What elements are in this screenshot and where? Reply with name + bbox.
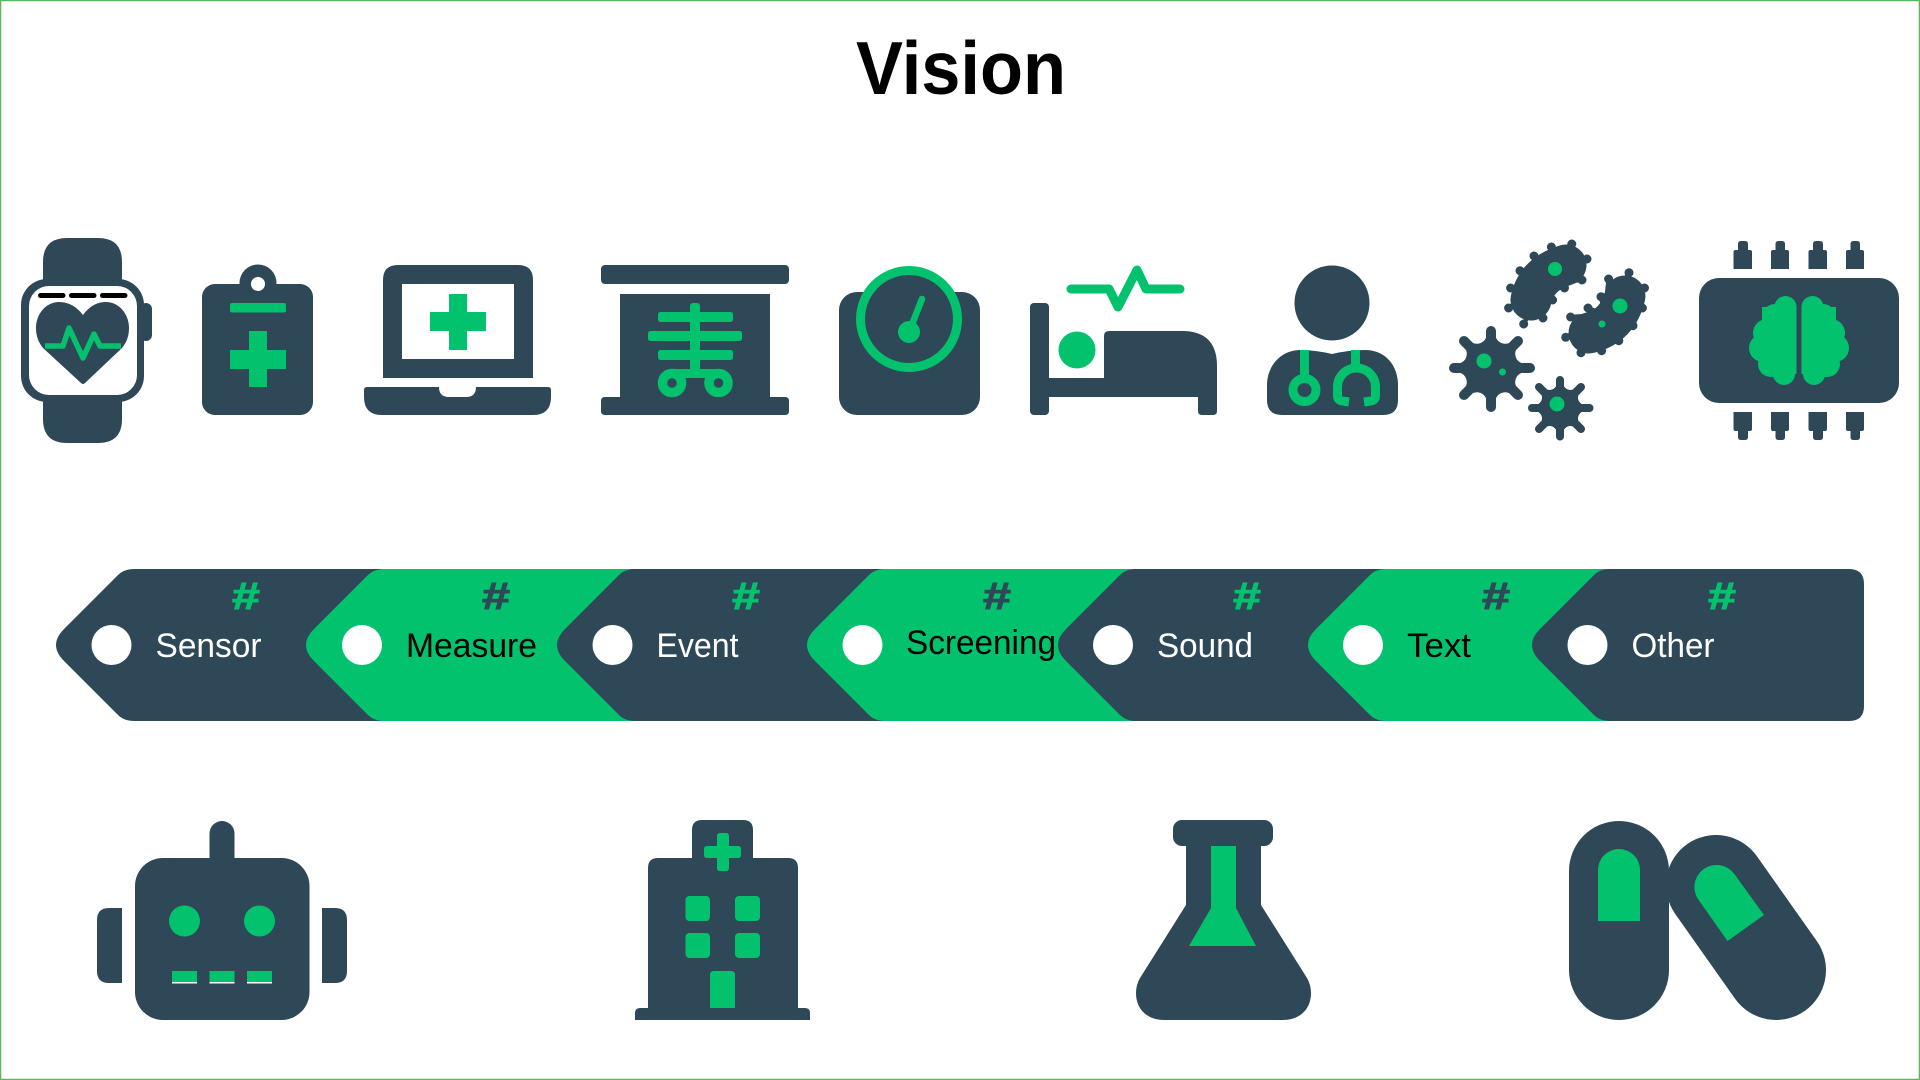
step: Sensor: Sensor bbox=[156, 627, 262, 665]
virus small bbox=[1527, 375, 1593, 441]
step: Event: # bbox=[732, 576, 760, 618]
step: Text bbox=[1308, 569, 1620, 721]
icon: viruses and bacteria bbox=[1447, 244, 1644, 441]
icon: doctor bbox=[1267, 266, 1398, 415]
icon: hospital building bbox=[635, 820, 810, 1020]
heartbeat line bbox=[45, 328, 121, 358]
bacterium lower bbox=[1566, 273, 1644, 353]
step: Other bbox=[1532, 569, 1864, 721]
step: Other: Other bbox=[1632, 627, 1714, 665]
step: Sensor: # bbox=[232, 576, 260, 618]
step: Event bbox=[557, 569, 887, 721]
step: Screening: Screening bbox=[906, 624, 1056, 662]
icon: medical clipboard bbox=[202, 264, 313, 415]
icon: smartwatch bbox=[21, 238, 152, 443]
heart bbox=[36, 302, 129, 384]
icon: hospital bed with pulse bbox=[1030, 270, 1217, 415]
chip pins bbox=[1734, 241, 1864, 440]
step: Sensor bbox=[56, 569, 386, 721]
step: Sound: # bbox=[1233, 576, 1261, 618]
title: Vision bbox=[856, 26, 1066, 110]
robot mouth bbox=[172, 971, 272, 984]
icon: weighing scale bbox=[839, 270, 980, 415]
icon: x-ray machine bbox=[601, 265, 789, 415]
icon: robot bbox=[97, 821, 347, 1020]
icon: lab flask bbox=[1136, 820, 1311, 1020]
step: Sound bbox=[1058, 569, 1388, 721]
virus large bbox=[1447, 324, 1535, 412]
stethoscope bbox=[1293, 350, 1376, 402]
step: Screening bbox=[807, 569, 1137, 721]
skeleton bbox=[648, 303, 742, 392]
step: Event: Event bbox=[656, 627, 739, 665]
step: Measure bbox=[306, 569, 636, 721]
step: Text: # bbox=[1482, 576, 1510, 618]
step: Other: # bbox=[1708, 576, 1736, 618]
icon: laptop with cross bbox=[364, 265, 551, 415]
icon: medicine capsules bbox=[1569, 821, 1776, 1020]
step: Sound: Sound bbox=[1157, 627, 1253, 665]
bacterium upper bbox=[1509, 244, 1587, 324]
step: Measure: # bbox=[482, 576, 510, 618]
brain bbox=[1749, 296, 1849, 385]
step: Text: Text bbox=[1407, 627, 1472, 665]
banner: seven-step arrow sequence bbox=[56, 569, 1864, 721]
icon: AI brain chip bbox=[1699, 241, 1899, 440]
step: Measure: Measure bbox=[406, 627, 537, 665]
step: Screening: # bbox=[983, 576, 1011, 618]
